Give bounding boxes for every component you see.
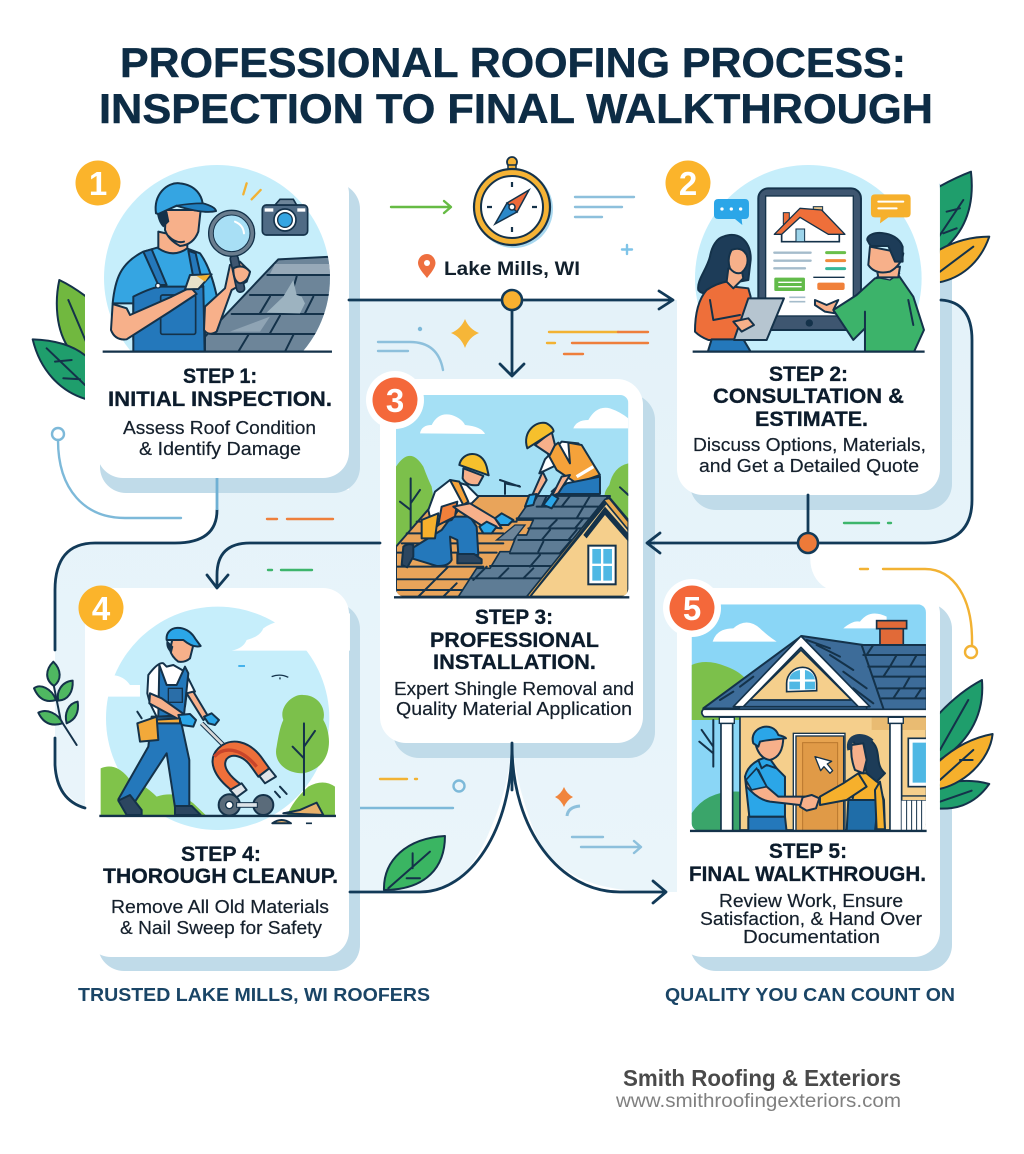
step 5 description: Satisfaction, & Hand Over bbox=[700, 908, 922, 929]
badge: step 2 number: 2 bbox=[679, 165, 697, 202]
badge: step 1 number bbox=[76, 160, 120, 206]
step 3 heading bbox=[430, 606, 599, 674]
connector lines and arrows bbox=[55, 290, 972, 903]
step 3 description: Expert Shingle Removal and bbox=[394, 678, 634, 699]
leaves beside card 2 bbox=[933, 172, 989, 283]
step 1 description bbox=[123, 417, 316, 459]
decorative accents bbox=[52, 197, 977, 853]
step 2 description: Discuss Options, Materials, bbox=[693, 434, 926, 455]
step 2 description: and Get a Detailed Quote bbox=[699, 455, 919, 476]
badge: step 4 number: 4 bbox=[92, 590, 111, 627]
illustration: consultation over a tablet bbox=[692, 165, 925, 353]
step 2 heading: STEP 2: bbox=[769, 363, 848, 386]
illustration: roofer inspecting shingles with magnifier bbox=[102, 165, 332, 353]
step 4 description: Remove All Old Materials bbox=[111, 896, 329, 917]
step 1 heading: STEP 1: bbox=[183, 365, 257, 388]
step 4 description bbox=[111, 896, 329, 938]
step 3 description bbox=[394, 678, 634, 719]
icon: compass bbox=[474, 157, 553, 248]
step 4 description: & Nail Sweep for Safety bbox=[120, 917, 323, 938]
tagline: quality: QUALITY YOU CAN COUNT ON bbox=[665, 984, 955, 1005]
step 3 heading: PROFESSIONAL bbox=[430, 629, 599, 652]
badge: step 3 number bbox=[366, 371, 424, 429]
step 3 heading: STEP 3: bbox=[475, 606, 553, 629]
step 5 description: Documentation bbox=[743, 926, 880, 947]
title bbox=[99, 39, 933, 132]
step 2 heading bbox=[713, 363, 904, 431]
leaf on flow line bbox=[384, 836, 445, 890]
footer: company name and website: Smith Roofing & Exteriors bbox=[623, 1065, 901, 1091]
footer: company name and website: www.smithroofingexteriors.com bbox=[615, 1091, 901, 1112]
title: PROFESSIONAL ROOFING PROCESS: bbox=[120, 39, 906, 86]
step 4 heading: STEP 4: bbox=[181, 843, 261, 866]
badge: step 5 number bbox=[663, 579, 721, 637]
badge: step 2 number bbox=[666, 160, 710, 206]
badge: step 1 number: 1 bbox=[89, 165, 107, 202]
step 4 heading: THOROUGH CLEANUP. bbox=[103, 865, 338, 888]
title: INSPECTION TO FINAL WALKTHROUGH bbox=[99, 85, 933, 132]
panel: step 3 professional installation bbox=[380, 379, 655, 758]
illustration: handshake in front of finished house bbox=[690, 604, 930, 832]
badge: step 4 number bbox=[78, 586, 124, 630]
illustration: worker sweeping with magnet bbox=[99, 607, 350, 830]
step 5 description bbox=[700, 890, 922, 947]
leaves beside card 5 bbox=[933, 680, 993, 809]
step 2 heading: CONSULTATION & bbox=[713, 385, 904, 408]
step 1 description: & Identify Damage bbox=[139, 438, 301, 459]
location label: Lake Mills, WI: Lake Mills, WI bbox=[444, 259, 580, 280]
footer: company name and website bbox=[615, 1065, 901, 1112]
step 5 heading bbox=[689, 840, 926, 886]
location label: Lake Mills, WI bbox=[418, 254, 580, 280]
step 2 description bbox=[693, 434, 926, 476]
step 5 description: Review Work, Ensure bbox=[719, 890, 903, 911]
step 4 heading bbox=[103, 843, 338, 888]
badge: step 3 number: 3 bbox=[386, 382, 404, 419]
panel: step 5 final walkthrough bbox=[677, 588, 952, 971]
step 1 heading bbox=[108, 365, 332, 411]
step 1 description: Assess Roof Condition bbox=[123, 417, 316, 438]
step 5 heading: STEP 5: bbox=[769, 840, 847, 863]
badge: step 5 number: 5 bbox=[683, 590, 701, 627]
background flow panel bbox=[55, 300, 972, 892]
tagline: trusted roofers: TRUSTED LAKE MILLS, WI ROOFERS bbox=[78, 984, 430, 1005]
illustration: roofers installing shingles bbox=[394, 395, 629, 597]
step 1 heading: INITIAL INSPECTION. bbox=[108, 388, 332, 411]
panel: step 2 consultation and estimate bbox=[677, 165, 952, 510]
step 3 heading: INSTALLATION. bbox=[433, 651, 596, 674]
leaf sprig beside card 4 bbox=[34, 662, 78, 745]
step 3 description: Quality Material Application bbox=[396, 698, 632, 719]
leaves behind card 1 bbox=[33, 280, 88, 399]
panel: step 1 initial inspection bbox=[97, 165, 360, 493]
panel: step 4 thorough cleanup bbox=[85, 588, 360, 971]
step 5 heading: FINAL WALKTHROUGH. bbox=[689, 863, 926, 886]
step 2 heading: ESTIMATE. bbox=[755, 408, 868, 431]
